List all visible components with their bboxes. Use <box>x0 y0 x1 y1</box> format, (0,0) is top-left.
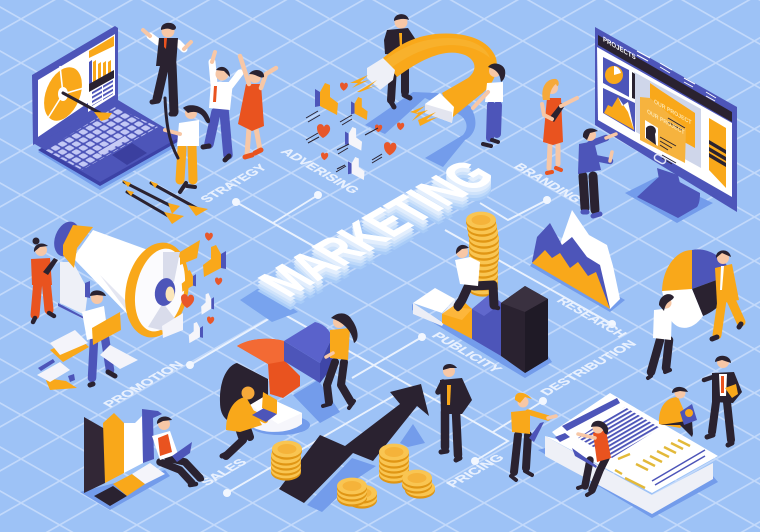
connector dots <box>186 191 616 497</box>
magnet shadow <box>365 92 475 167</box>
magnet <box>367 34 497 126</box>
label: research: RESEARCH <box>553 295 630 340</box>
title: MARKETING: MARKETING <box>246 157 508 308</box>
pie chart: big standing <box>662 249 730 328</box>
person: crouching man with badge <box>659 387 697 437</box>
megaphone <box>50 218 200 343</box>
bolts from magnet <box>350 75 378 92</box>
person: crouching man with laptop <box>222 386 277 456</box>
label: promotion: PROMOTION <box>100 359 187 410</box>
label: branding: BRANDING <box>510 161 586 205</box>
title: MARKETING <box>246 153 508 317</box>
person: man with raised arms <box>203 52 240 160</box>
bar chart with arrow shaped columns <box>80 409 170 510</box>
label: pricing: PRICING <box>443 452 508 490</box>
coins on bar chart <box>466 212 499 297</box>
person: woman sitting on papers <box>572 421 611 495</box>
floating likes and hearts <box>306 82 404 180</box>
mountain research chart <box>530 210 625 312</box>
person: woman carrying block <box>323 313 358 408</box>
envelopes and document pile <box>37 330 138 390</box>
monitor <box>595 27 737 223</box>
title: MARKETING: MARKETING <box>246 163 508 314</box>
person: man sitting with laptop <box>152 417 202 485</box>
person: man in dark suit centre <box>438 364 472 460</box>
person: woman in red dress <box>238 56 276 157</box>
person: man in orange suit <box>712 250 741 339</box>
label: strategy: STRATEGY <box>197 162 271 205</box>
coins on floor <box>271 441 435 509</box>
laptop with target pie <box>32 26 184 190</box>
bar chart: publicity steps <box>412 286 552 378</box>
label: destribution: DESTRIBUTION <box>537 338 640 398</box>
pie blocks centre <box>220 322 340 435</box>
megaphone stand <box>60 262 88 315</box>
title: MARKETING: MARKETING <box>246 160 508 311</box>
title shadow <box>240 286 298 322</box>
monitor: OUR PROJECT <box>654 99 692 127</box>
monitor: OUR PROJECT <box>647 109 685 137</box>
connector lines <box>190 195 612 493</box>
title: MARKETING: MARKETING <box>246 153 508 304</box>
paper stack report <box>538 393 718 518</box>
label: sales: SALES <box>197 456 251 488</box>
person: man holding magnet <box>384 14 416 107</box>
person: woman head <box>659 294 682 318</box>
label: adverising: ADVERISING <box>277 146 363 196</box>
growth arrow <box>279 384 429 512</box>
person: man at monitor <box>578 128 616 216</box>
title: MARKETING: MARKETING <box>246 166 508 317</box>
person: archer woman <box>165 98 210 192</box>
floating likes near megaphone <box>162 232 226 343</box>
label: publicity: PUBLICITY <box>428 330 506 375</box>
person: woman pushing pie <box>648 308 672 378</box>
person: man with envelope <box>82 290 121 385</box>
person: woman in orange jumpsuit <box>31 238 58 322</box>
person: man in vest <box>143 23 191 114</box>
person: man climbing with coins <box>455 245 498 309</box>
person: man with trophy <box>704 356 742 445</box>
person: pricing woman <box>511 393 556 480</box>
screen headline text: PROJECTS <box>603 36 636 62</box>
person: woman holding magnet <box>473 63 505 146</box>
arrows on floor <box>122 180 208 224</box>
person: woman branding <box>542 79 577 173</box>
